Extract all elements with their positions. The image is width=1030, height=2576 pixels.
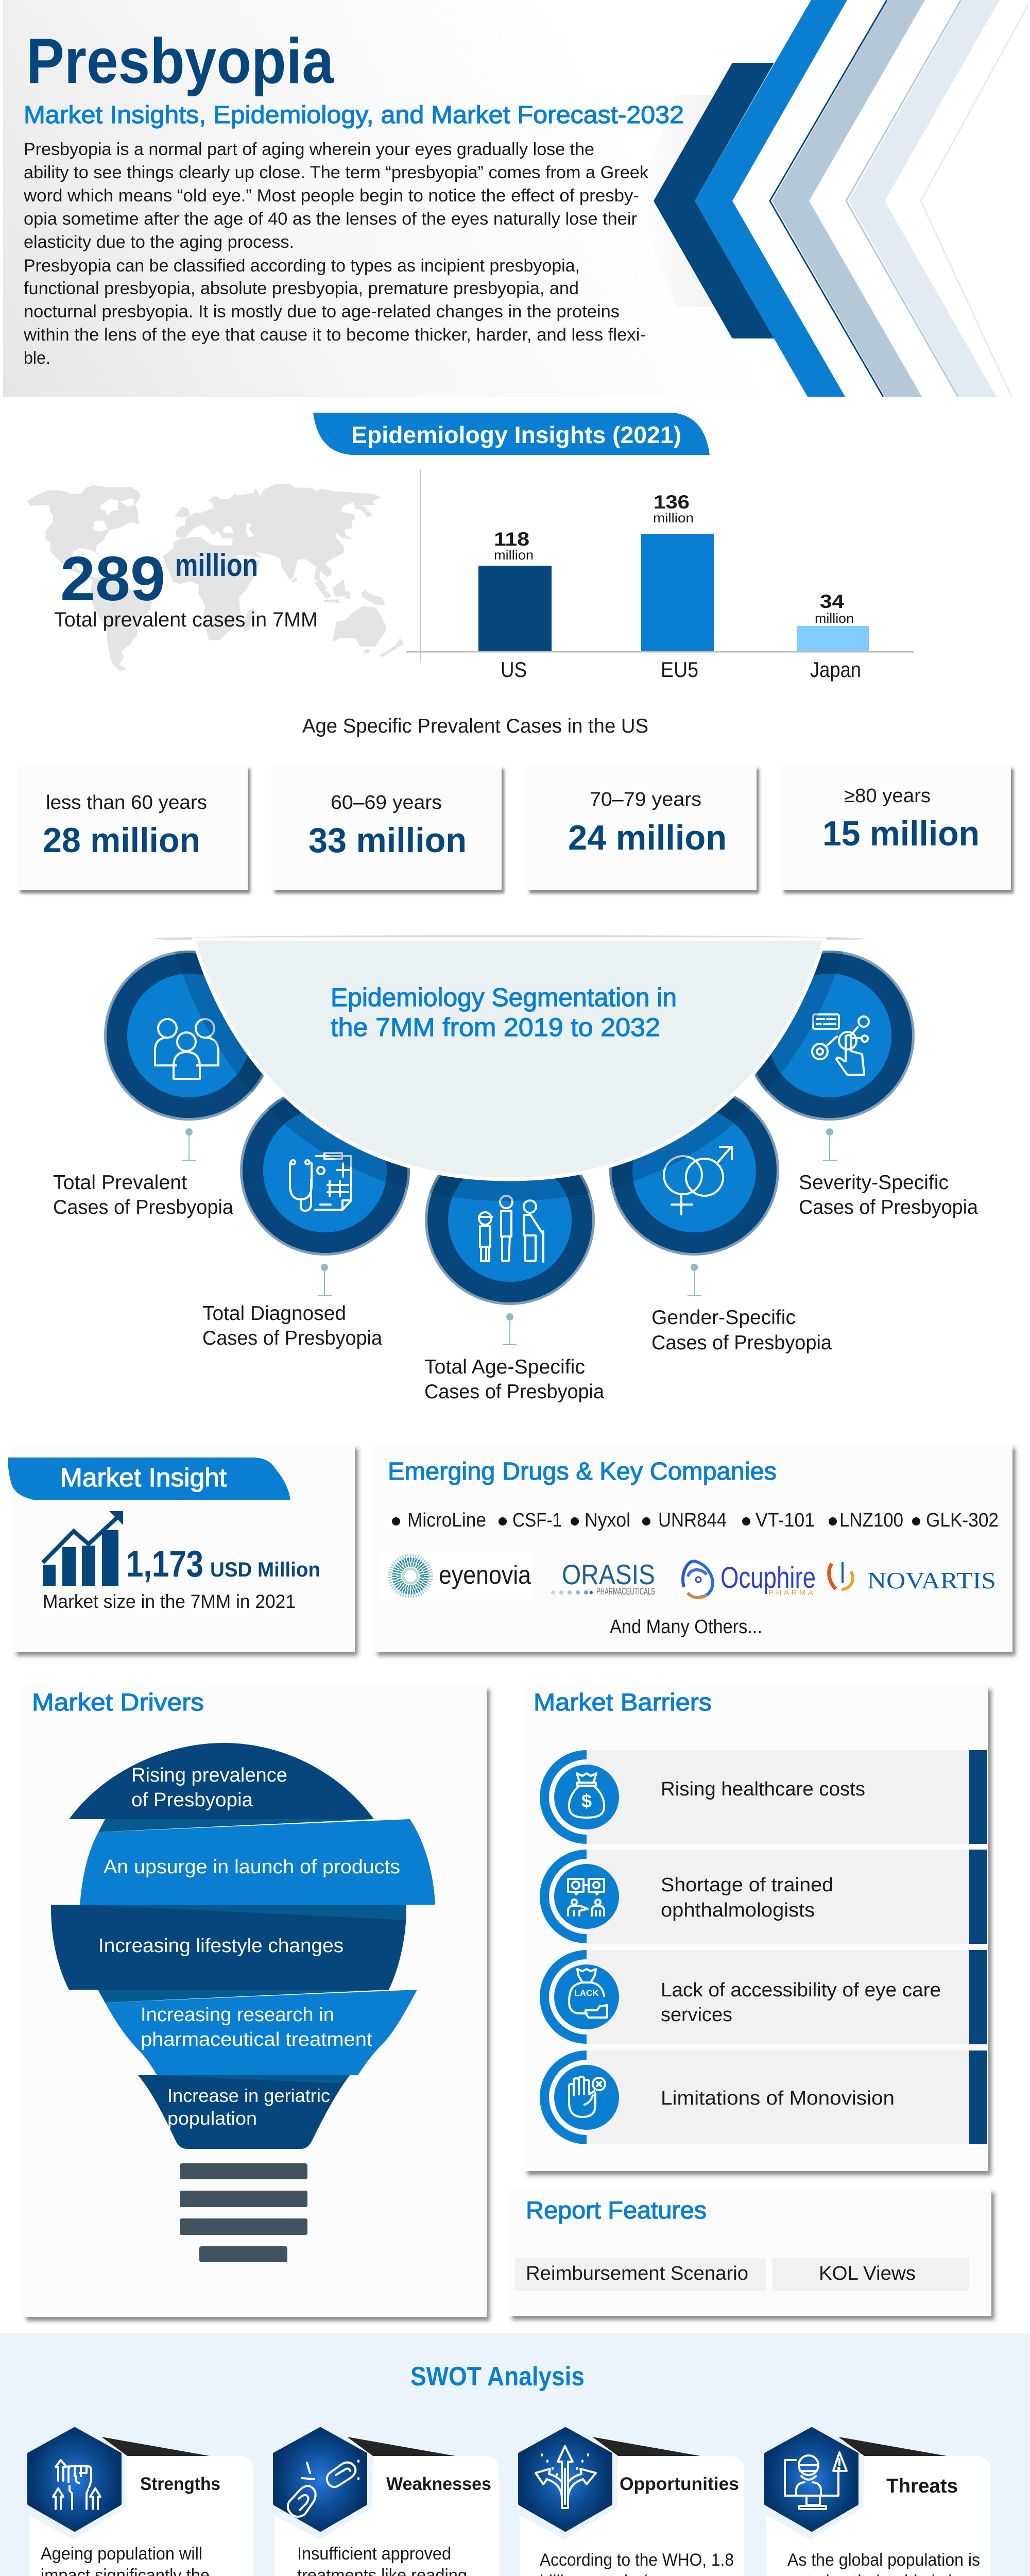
heading: age specific cases: Age Specific Prevalent Cases in the US bbox=[302, 715, 648, 737]
barrier: shortage of ophthalmologists: ophthalmologists bbox=[661, 1900, 815, 1921]
driver: geriatric population bbox=[138, 2075, 350, 2149]
card: threats bbox=[766, 2429, 990, 2576]
icon: experts bbox=[568, 1879, 604, 1916]
lightbulb infographic bbox=[51, 1743, 435, 2262]
driver: rising prevalence bbox=[69, 1743, 374, 1819]
driver: geriatric population: population bbox=[167, 2108, 257, 2129]
bar chart: prevalent cases: million bbox=[815, 611, 854, 626]
barrier: lack of accessibility: services bbox=[661, 2004, 732, 2026]
label: gender specific: Cases of Presbyopia bbox=[651, 1332, 832, 1354]
heading: SWOT Analysis bbox=[410, 2362, 585, 2392]
barrier: lack of accessibility: Lack of accessibility of eye care bbox=[661, 1979, 941, 2001]
card: opportunities bbox=[520, 2429, 744, 2576]
card: 80+ years: ≥80 years bbox=[844, 785, 931, 807]
card: 80+ years: 15 million bbox=[822, 814, 980, 853]
driver: pharmaceutical research: Increasing research in bbox=[141, 2004, 334, 2026]
driver: lifestyle changes: Increasing lifestyle changes bbox=[98, 1935, 344, 1957]
hexagon icon: broken chain bbox=[274, 2429, 455, 2539]
label: total prevalent: Cases of Presbyopia bbox=[53, 1196, 233, 1218]
label: severity specific: Severity-Specific bbox=[799, 1172, 949, 1194]
intro text bbox=[23, 140, 649, 368]
hexagon icon: arrows bbox=[520, 2429, 700, 2539]
label: age specific bbox=[424, 1356, 604, 1403]
intro text: opia sometime after the age of 40 as the lenses of the eyes naturally lose their bbox=[24, 209, 637, 229]
bowl: segmentation title: the 7MM from 2019 to 2032 bbox=[331, 1013, 660, 1042]
intro text: Presbyopia is a normal part of aging wherein your eyes gradually lose the bbox=[24, 140, 594, 159]
weaknesses text: Insufficient approved bbox=[297, 2544, 451, 2564]
bar chart: prevalent cases bbox=[406, 469, 914, 682]
pin: diagnosed bbox=[318, 1264, 332, 1296]
chip: reimbursement: Reimbursement Scenario bbox=[526, 2263, 748, 2284]
label: total diagnosed bbox=[202, 1302, 382, 1349]
weaknesses text bbox=[297, 2544, 491, 2576]
heading: epidemiology insights bbox=[313, 413, 710, 455]
icon: money bag: $ bbox=[581, 1790, 592, 1811]
and many others: And Many Others... bbox=[610, 1616, 762, 1638]
logo: ocuphire bbox=[679, 1559, 816, 1599]
drug list: MicroLine bbox=[407, 1510, 486, 1531]
driver: rising prevalence: of Presbyopia bbox=[131, 1789, 253, 1811]
bowl: segmentation title: Epidemiology Segmentation in bbox=[331, 983, 677, 1012]
driver: pharmaceutical research: pharmaceutical treatment bbox=[141, 2029, 372, 2050]
card: 60-69 years: 33 million bbox=[308, 821, 467, 860]
icon: money bag bbox=[569, 1773, 604, 1818]
logo: eyenovia bbox=[380, 1552, 531, 1599]
card: weaknesses bbox=[274, 2429, 499, 2576]
hexagon icon: hacker monitor bbox=[766, 2429, 947, 2539]
icon: stop hand bbox=[569, 2077, 605, 2117]
icon: three generations bbox=[479, 1196, 543, 1262]
label: gender specific: Gender-Specific bbox=[651, 1307, 796, 1329]
bowl shadow on circles bbox=[194, 939, 825, 1179]
card: 70-79 years: 70–79 years bbox=[590, 789, 701, 810]
intro text: word which means “old eye.” Most people begin to notice the effect of presby- bbox=[23, 186, 639, 206]
logo: novartis bbox=[829, 1562, 996, 1594]
drug list: Nyxol bbox=[585, 1510, 630, 1531]
icon: lack money bag: LACK bbox=[574, 1988, 599, 1998]
drug list: UNR844 bbox=[658, 1510, 727, 1531]
circle: total prevalent bbox=[104, 951, 274, 1121]
bar chart: prevalent cases: 34 bbox=[820, 591, 844, 612]
logo: ocuphire: Ocuphire bbox=[720, 1561, 816, 1595]
heading: Market Barriers bbox=[534, 1688, 712, 1716]
circle: severity specific bbox=[745, 951, 915, 1121]
logo: orasis: PHARMACEUTICALS bbox=[596, 1586, 655, 1597]
card: less than 60 years bbox=[18, 766, 248, 890]
top ellipse bbox=[153, 935, 866, 942]
chip: KOL views: KOL Views bbox=[819, 2263, 916, 2284]
panel: header bbox=[3, 0, 1030, 397]
world map with total: million bbox=[175, 548, 258, 583]
decorative chevrons bbox=[634, 0, 1028, 397]
card: 70-79 years bbox=[527, 766, 757, 890]
label: gender specific bbox=[651, 1307, 832, 1354]
card: threats: Threats bbox=[886, 2475, 958, 2497]
card: 60-69 years: 60–69 years bbox=[331, 792, 442, 814]
stat: 289 million: 289 bbox=[60, 544, 165, 614]
market value: 1,173 bbox=[126, 1544, 203, 1585]
barrier: limitations of monovision bbox=[540, 2050, 987, 2144]
label: age specific: Cases of Presbyopia bbox=[424, 1381, 604, 1403]
driver: rising prevalence: Rising prevalence bbox=[131, 1765, 287, 1786]
label: total diagnosed: Total Diagnosed bbox=[202, 1302, 346, 1325]
barrier: shortage of ophthalmologists: Shortage of trained bbox=[661, 1874, 833, 1896]
subtitle: Market Insights, Epidemiology, and Market Forecast-2032 bbox=[24, 101, 684, 129]
panel: emerging drugs and key companies bbox=[374, 1444, 1012, 1652]
bar chart: prevalent cases: 136 bbox=[654, 492, 690, 513]
pin: severity bbox=[823, 1129, 837, 1160]
intro text: nocturnal presbyopia. It is mostly due to age-related changes in the proteins bbox=[24, 302, 620, 321]
chip: KOL views bbox=[772, 2258, 969, 2291]
card: strengths: Strengths bbox=[140, 2474, 220, 2494]
pin: gender bbox=[688, 1264, 701, 1296]
chip: reimbursement bbox=[515, 2258, 766, 2291]
pin: prevalent bbox=[182, 1129, 196, 1160]
icon: people bbox=[155, 1019, 218, 1079]
barrier: rising healthcare costs: Rising healthcare costs bbox=[661, 1778, 865, 1800]
driver: geriatric population: Increase in geriatric bbox=[167, 2085, 330, 2106]
market value label: Market size in the 7MM in 2021 bbox=[43, 1591, 296, 1612]
bar chart: prevalent cases: 118 bbox=[494, 529, 529, 550]
icon: touch network bbox=[812, 1014, 869, 1075]
heading: Market Drivers bbox=[32, 1688, 204, 1716]
card: less than 60 years: 28 million bbox=[43, 821, 200, 860]
label: total prevalent bbox=[53, 1172, 233, 1218]
circle: age specific bbox=[425, 1135, 595, 1305]
bar chart: prevalent cases: million bbox=[653, 510, 694, 526]
bar chart: prevalent cases: Japan bbox=[810, 657, 861, 682]
bowl: segmentation title bbox=[194, 939, 825, 1179]
title: Presbyopia bbox=[26, 26, 334, 97]
card: 70-79 years: 24 million bbox=[568, 818, 727, 857]
panel: market insight bbox=[8, 1444, 355, 1652]
circle: gender specific bbox=[609, 1086, 779, 1256]
logo: novartis: NOVARTIS bbox=[867, 1567, 996, 1594]
heading: Report Features bbox=[526, 2196, 707, 2224]
bar chart: prevalent cases: million bbox=[494, 547, 534, 563]
strengths text bbox=[40, 2544, 243, 2576]
drug list bbox=[392, 1510, 999, 1531]
label: age specific: Total Age-Specific bbox=[424, 1356, 585, 1378]
intro text: ble. bbox=[24, 348, 50, 368]
heading: Emerging Drugs & Key Companies bbox=[388, 1458, 777, 1485]
world map bbox=[27, 483, 404, 671]
intro text: ability to see things clearly up close. The term “presbyopia” comes from a Greek bbox=[24, 163, 649, 182]
barrier: limitations of monovision: Limitations of Monovision bbox=[661, 2088, 895, 2109]
logo: ocuphire: PHARMA bbox=[768, 1588, 813, 1597]
logo: eyenovia: eyenovia bbox=[439, 1561, 531, 1589]
circle: total diagnosed bbox=[240, 1086, 410, 1256]
card: less than 60 years: less than 60 years bbox=[46, 792, 207, 814]
intro text: within the lens of the eye that cause it to become thicker, harder, and less flexi- bbox=[23, 325, 646, 345]
driver: upsurge in launch bbox=[80, 1819, 435, 1905]
icon: lack money bag bbox=[569, 1969, 607, 2018]
epidemiology segmentation diagram bbox=[53, 935, 978, 1403]
bulb base bbox=[180, 2163, 307, 2262]
strengths text: Ageing population will bbox=[41, 2544, 202, 2564]
barrier: shortage of ophthalmologists bbox=[540, 1850, 987, 1944]
world map with total bbox=[27, 483, 404, 671]
panel: report features bbox=[509, 2188, 991, 2316]
hexagon icon: fist bbox=[29, 2429, 210, 2539]
card: 60-69 years bbox=[272, 766, 502, 890]
barrier: lack of accessibility bbox=[540, 1950, 987, 2044]
threats text: As the global population is bbox=[787, 2550, 980, 2570]
intro text: functional presbyopia, absolute presbyopia, premature presbyopia, and bbox=[24, 279, 579, 298]
drug list: LNZ100 bbox=[839, 1510, 903, 1531]
logo: orasis bbox=[551, 1558, 655, 1597]
logo: orasis: ORASIS bbox=[562, 1558, 655, 1590]
panel: market insight: USD Million bbox=[210, 1558, 320, 1581]
panel: market drivers bbox=[23, 1685, 487, 2317]
panel: market barriers bbox=[524, 1685, 988, 2171]
intro text: Presbyopia can be classified according to types as incipient presbyopia, bbox=[24, 256, 580, 276]
label: total diagnosed: Cases of Presbyopia bbox=[202, 1327, 382, 1349]
label: severity specific bbox=[799, 1172, 978, 1218]
drug list: GLK-302 bbox=[926, 1510, 999, 1531]
intro text: elasticity due to the aging process. bbox=[24, 232, 294, 252]
label: severity specific: Cases of Presbyopia bbox=[799, 1196, 978, 1218]
card: weaknesses: Weaknesses bbox=[386, 2474, 491, 2494]
pin: age bbox=[503, 1314, 517, 1345]
icon: growth chart bbox=[43, 1511, 123, 1586]
heading banner bbox=[8, 1458, 290, 1500]
barrier: rising healthcare costs bbox=[540, 1750, 987, 1844]
card: 80+ years bbox=[781, 766, 1011, 890]
section: SWOT analysis bbox=[0, 2333, 1030, 2576]
bar chart: prevalent cases: EU5 bbox=[661, 657, 698, 682]
label: total prevalent: Total Prevalent bbox=[53, 1172, 187, 1194]
drug list: CSF-1 bbox=[512, 1510, 562, 1531]
card: strengths bbox=[29, 2429, 253, 2576]
driver: pharmaceutical research bbox=[98, 1990, 417, 2075]
card: opportunities: Opportunities bbox=[620, 2474, 739, 2494]
drug list: VT-101 bbox=[756, 1510, 815, 1531]
bar chart: prevalent cases: US bbox=[501, 657, 527, 682]
icon: gender symbols bbox=[664, 1147, 732, 1214]
stat label: Total prevalent cases in 7MM bbox=[54, 608, 318, 631]
heading: epidemiology insights: Epidemiology Insights (2021) bbox=[351, 421, 681, 448]
heading banner: Market Insight bbox=[60, 1463, 227, 1492]
opportunities text: According to the WHO, 1.8 bbox=[540, 2550, 734, 2570]
icon: stethoscope and clipboard bbox=[290, 1153, 351, 1211]
driver: lifestyle changes bbox=[51, 1905, 406, 1990]
driver: upsurge in launch: An upsurge in launch of products bbox=[104, 1856, 400, 1878]
